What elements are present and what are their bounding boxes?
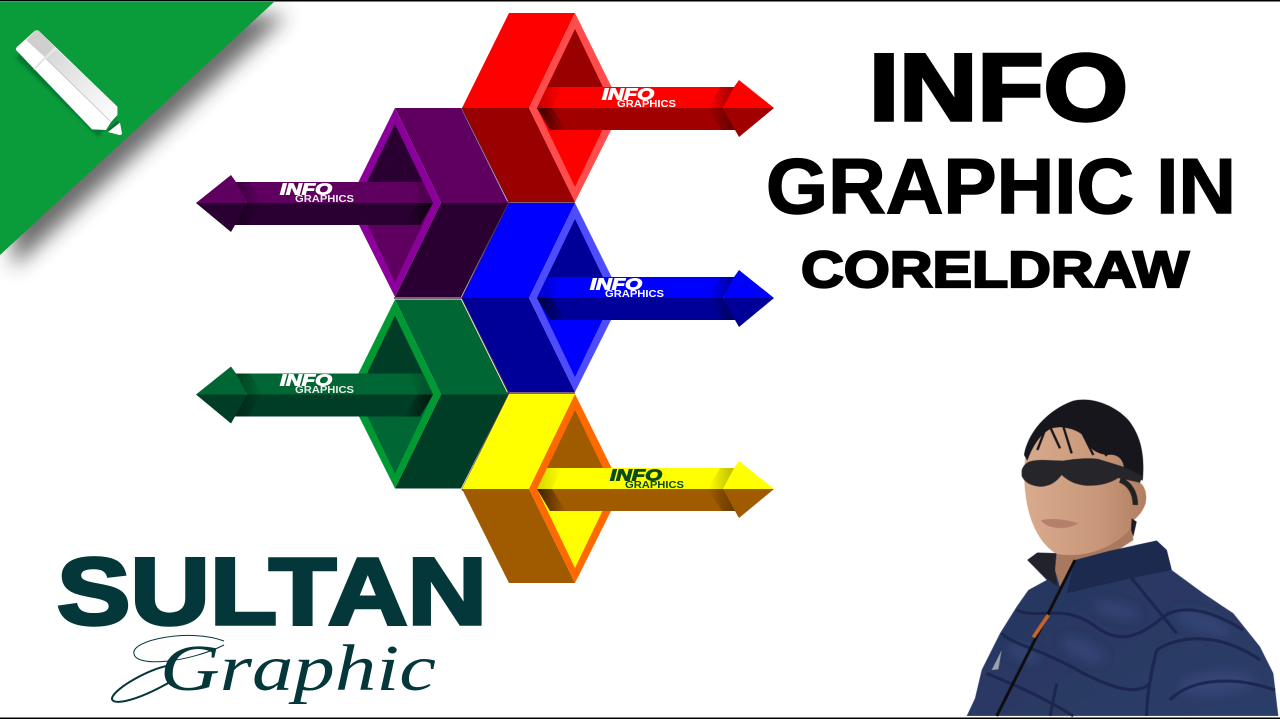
neck shadow [1055,530,1133,587]
hair behind ear [1131,518,1137,537]
sunglasses [1022,458,1143,487]
label: INFO GRAPHICS [610,468,684,491]
hair [1024,400,1143,481]
jacket puff highlights [1005,597,1258,699]
logo flourish [112,635,224,702]
zipper [997,560,1075,716]
label: INFO GRAPHICS: INFO [602,86,655,104]
label: INFO GRAPHICS: GRAPHICS [295,385,354,396]
hexagon arrow: red [462,13,774,202]
label: INFO GRAPHICS [280,182,354,205]
portrait: man with sunglasses and navy jacket [967,400,1278,716]
label: INFO GRAPHICS: GRAPHICS [605,289,664,300]
title: GRAPHIC IN: GRAPHIC IN [766,142,1236,230]
bottom frame line [0,718,1280,719]
neck and face [1024,427,1146,587]
top frame line [0,0,1280,2]
shirt collar [1117,539,1135,551]
diagram: hexagon arrows [196,13,774,583]
logo word: Graphic: Graphic [160,632,436,705]
label: INFO GRAPHICS: INFO [280,182,333,198]
hexagon arrow: yellow [462,394,774,583]
corner banner: green triangle with shadow [0,0,1280,268]
hexagon arrow: blue [462,203,774,392]
quilting lines [987,578,1275,716]
label: INFO GRAPHICS: INFO [280,372,333,390]
zipper pull tag [1033,615,1048,637]
logo: SULTAN Graphic [57,539,487,705]
jacket collar [1067,541,1172,593]
label: INFO GRAPHICS: INFO [590,276,643,294]
label: INFO GRAPHICS: GRAPHICS [617,99,676,110]
hexagon seams [394,108,575,490]
hair fringe strands [1037,427,1107,456]
jacket logo [992,650,1002,670]
label: INFO GRAPHICS: GRAPHICS [625,480,684,491]
logo word: SULTAN: SULTAN [57,539,487,645]
hexagon arrow: green [196,300,508,488]
earpiece [1120,480,1135,505]
title: INFO: INFO [869,35,1128,141]
label: INFO GRAPHICS: GRAPHICS [295,194,354,205]
label: INFO GRAPHICS [602,86,676,110]
title: CORELDRAW: CORELDRAW [801,241,1190,298]
hexagon arrow: purple [196,108,508,297]
label: INFO GRAPHICS [280,372,354,396]
mouth [1041,519,1078,528]
label: INFO GRAPHICS: INFO [610,468,663,484]
collar inner [1027,553,1057,587]
jacket [967,541,1278,716]
icon: pencil [16,30,122,137]
label: INFO GRAPHICS [590,276,664,300]
